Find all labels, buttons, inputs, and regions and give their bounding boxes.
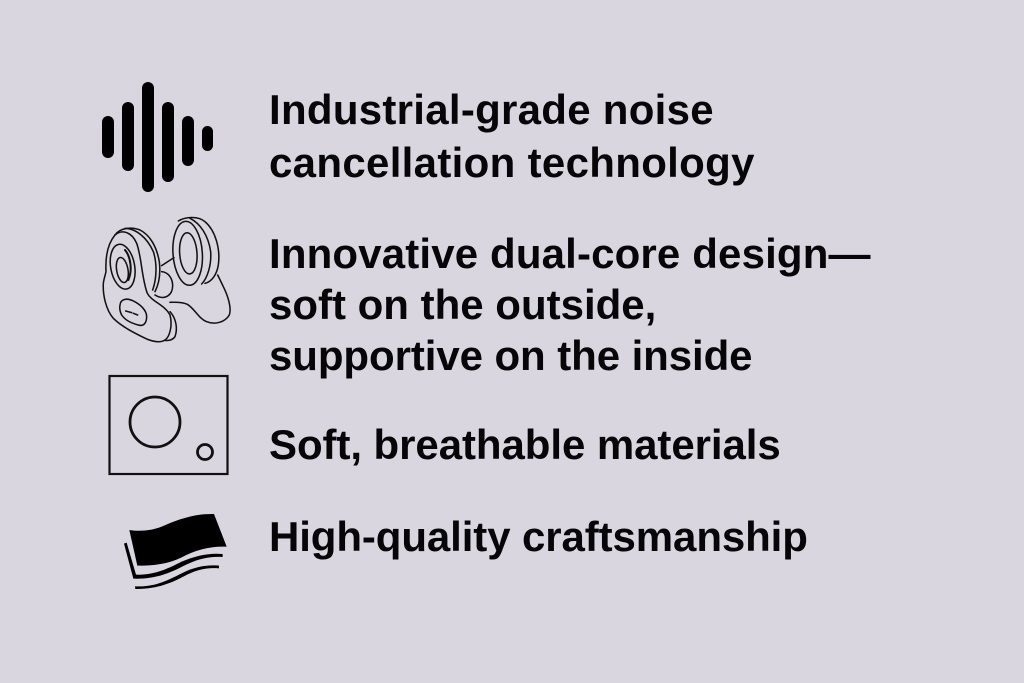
icon: earbuds [102, 216, 231, 342]
text: noise cancellation [269, 86, 755, 186]
text: dual-core design: Innovative dual-core design— [269, 230, 871, 277]
text: noise cancellation: cancellation technology [269, 139, 755, 186]
text: craftsmanship: High-quality craftsmanship [269, 513, 808, 560]
text: dual-core design: soft on the outside, [269, 281, 656, 328]
text: breathable materials: Soft, breathable materials [269, 421, 781, 468]
text: dual-core design [269, 230, 871, 379]
text: dual-core design: supportive on the inside [269, 332, 752, 379]
text: noise cancellation: Industrial-grade noise [269, 86, 714, 133]
icon: fabric layers [124, 514, 227, 589]
icon: sound wave [102, 82, 213, 192]
icon: square with circles [108, 374, 229, 476]
